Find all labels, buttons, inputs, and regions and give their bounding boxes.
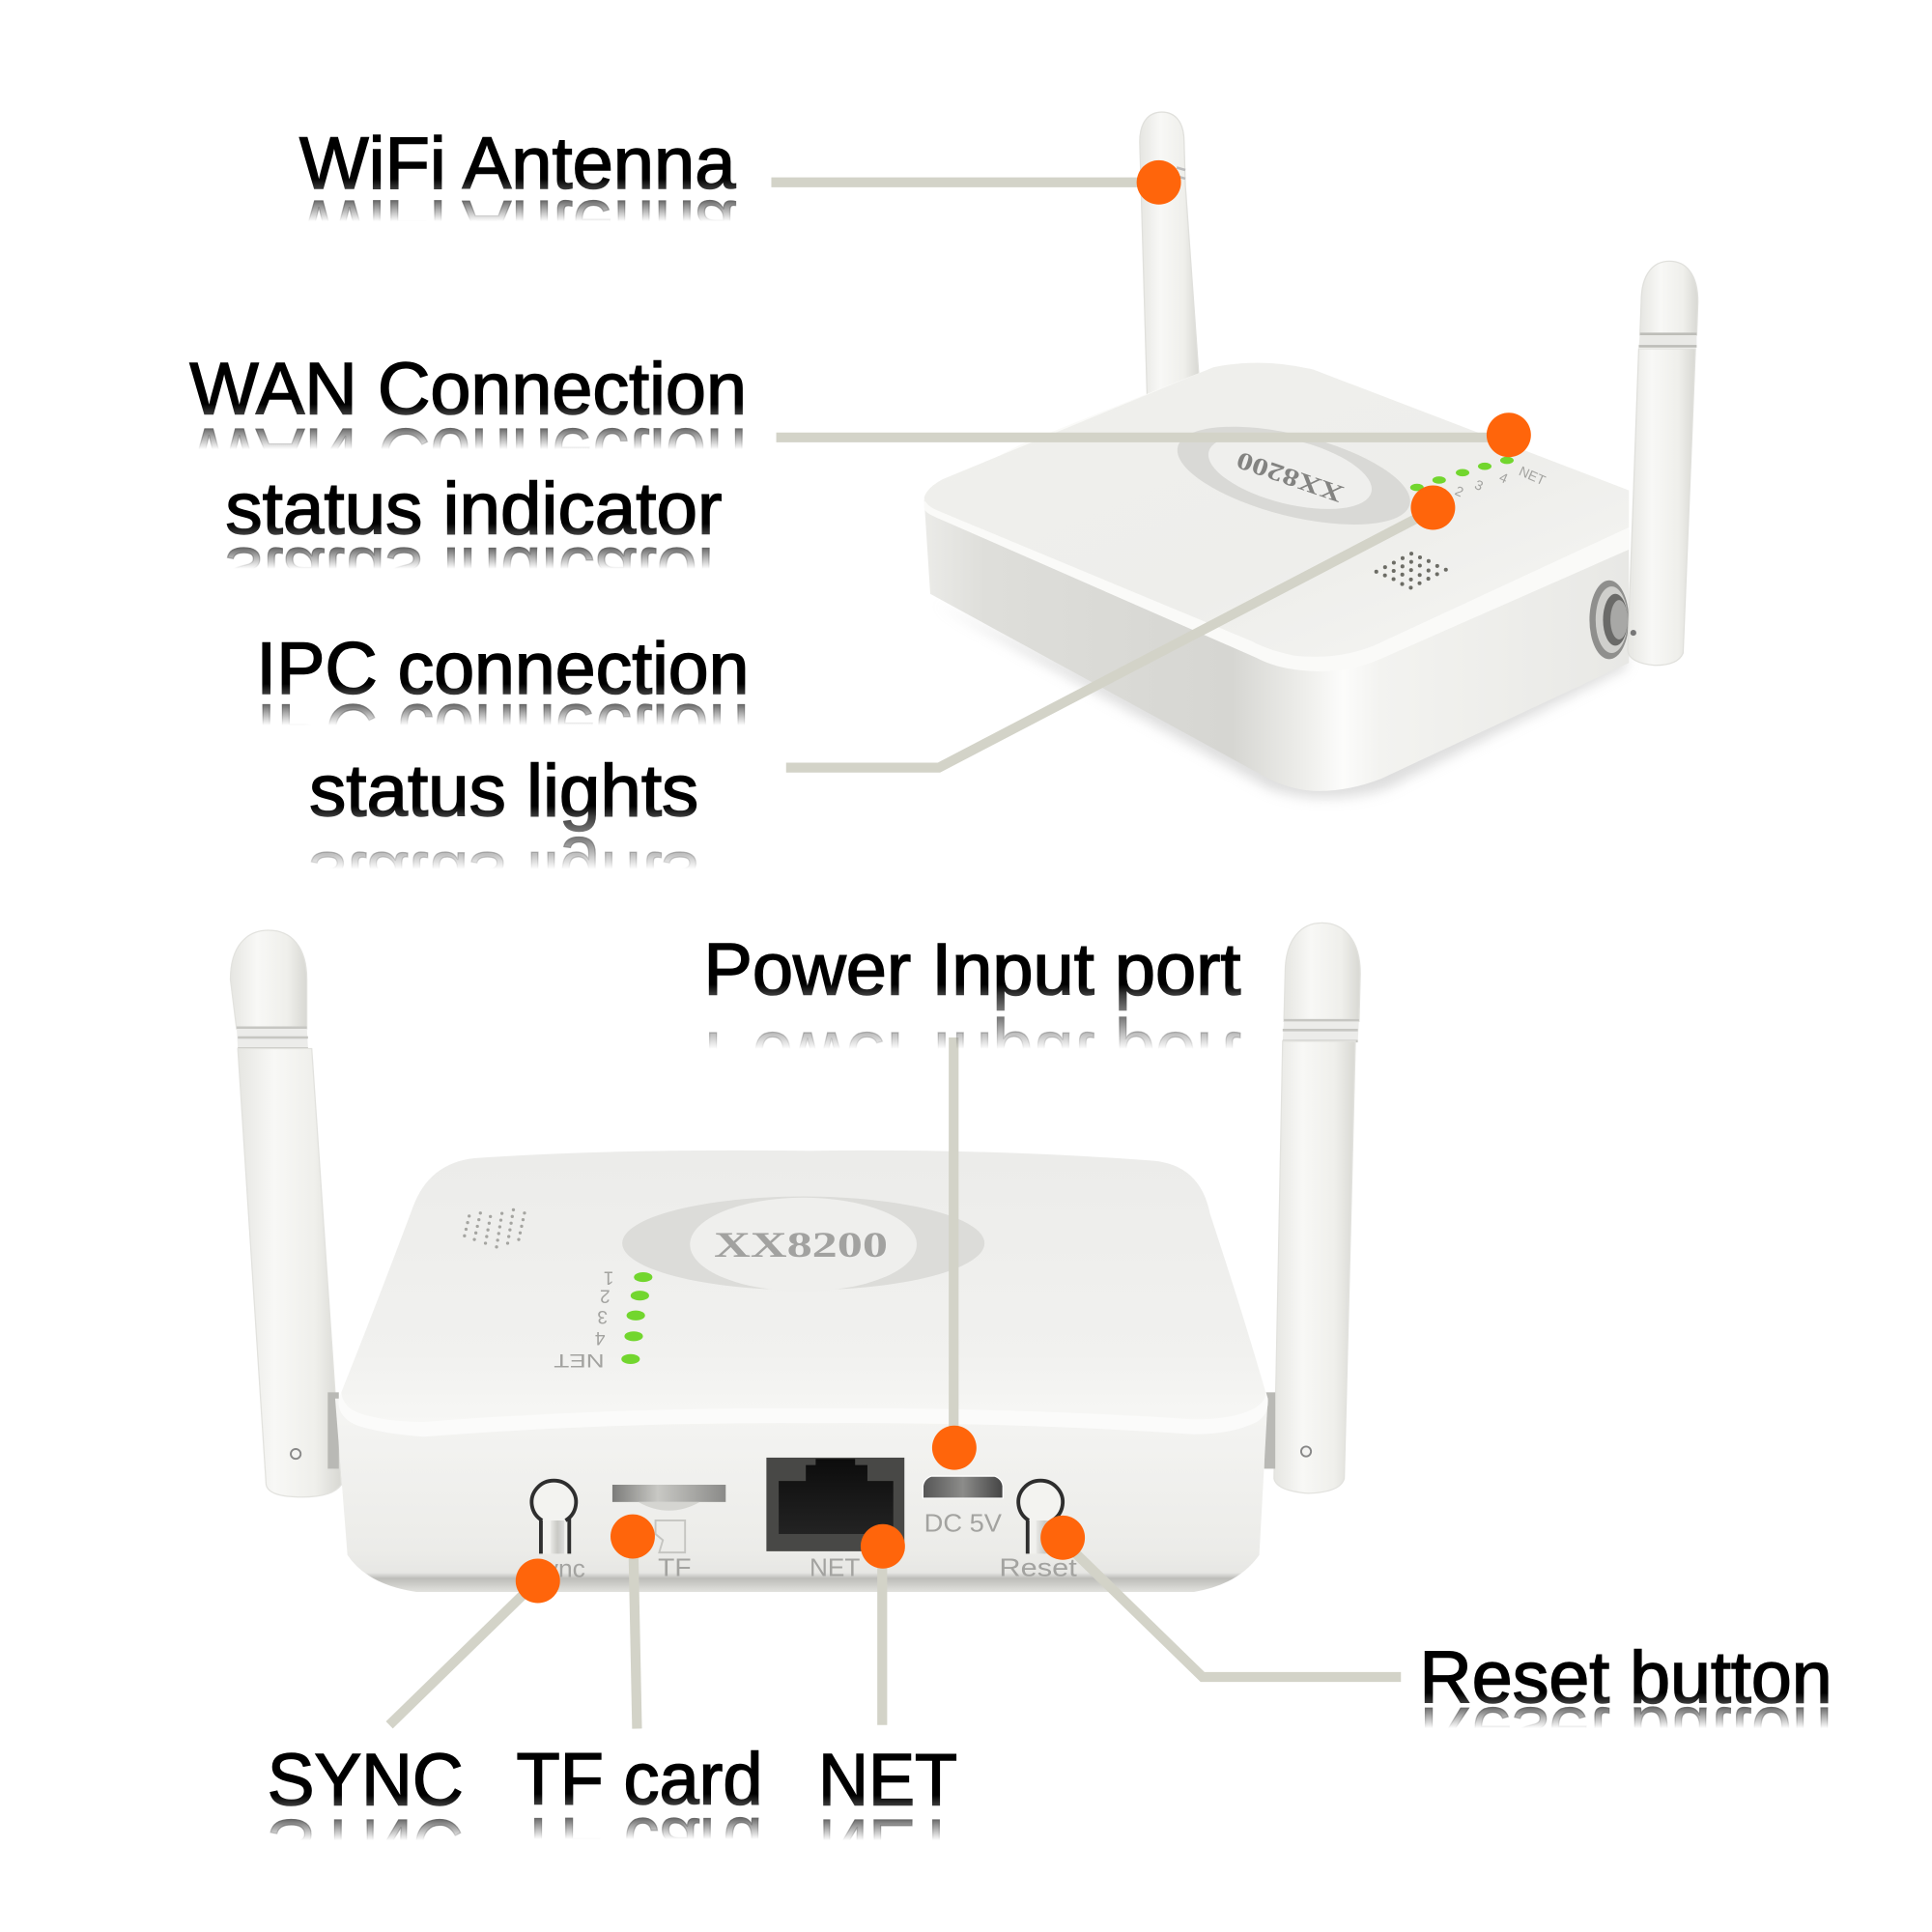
LED labels: 2 <box>1453 483 1466 499</box>
label: SYNC <box>268 1740 464 1886</box>
marker: reset <box>1040 1516 1085 1560</box>
label: status indicator: status indicator <box>225 468 722 550</box>
right antenna <box>1274 923 1360 1493</box>
bottom router photo: rear view <box>231 923 1360 1592</box>
label: WAN Connection: WAN Connection <box>189 412 747 495</box>
speaker holes <box>465 1208 525 1247</box>
label: status lights <box>309 750 698 919</box>
logo text: XX8200 <box>1233 446 1347 508</box>
LED labels: NET <box>1517 463 1548 488</box>
label: status lights: status lights <box>309 750 698 832</box>
logo badge <box>1168 408 1420 544</box>
marker: TF card <box>611 1515 655 1559</box>
label: IPC connection <box>256 628 750 771</box>
leader line: IPC status <box>786 515 1423 768</box>
leader line: reset <box>1065 1543 1401 1677</box>
antenna mounts <box>327 1392 1275 1468</box>
LED labels, upside down: 4 <box>594 1327 605 1348</box>
leader line: power input <box>950 1037 957 1441</box>
LED labels, upside down: 1 <box>604 1266 613 1287</box>
label: WiFi Antenna: WiFi Antenna <box>299 123 736 205</box>
LED labels, upside down: NET <box>554 1350 605 1370</box>
label: WiFi Antenna: WiFi Antenna <box>299 185 736 267</box>
label: TF card: TF card <box>516 1803 763 1885</box>
router lid <box>338 1151 1268 1436</box>
label: Power Input port: Power Input port <box>703 928 1240 1010</box>
router body front <box>335 1399 1267 1592</box>
top router photo: angled view <box>924 112 1698 798</box>
leader line: WiFi antenna <box>771 179 1146 186</box>
label: SYNC: SYNC <box>268 1804 464 1886</box>
label: TF card: TF card <box>516 1738 763 1820</box>
marker: IPC status <box>1410 486 1455 529</box>
label: Reset button: Reset button <box>1419 1637 1833 1719</box>
status LEDs <box>621 1272 652 1364</box>
LED labels, upside down: 3 <box>597 1306 608 1326</box>
reset button <box>1018 1481 1063 1553</box>
logo badge <box>622 1197 984 1292</box>
shadow under top router <box>936 604 1627 798</box>
label: NET: NET <box>818 1804 957 1886</box>
connector on side <box>1589 581 1629 659</box>
leader line: NET <box>878 1547 886 1725</box>
port labels: Reset <box>999 1554 1077 1581</box>
LED labels, upside down: 2 <box>600 1285 611 1305</box>
marker: power input <box>932 1426 977 1470</box>
label: NET: NET <box>818 1740 957 1822</box>
label: status indicator <box>225 468 722 614</box>
LED labels <box>1453 463 1548 499</box>
label: NET <box>818 1740 957 1886</box>
NET RJ45 port <box>766 1458 904 1551</box>
leader line: WAN status <box>777 434 1497 441</box>
label: Power Input port <box>703 928 1240 1098</box>
label: SYNC: SYNC <box>268 1740 464 1822</box>
marker: NET <box>861 1524 905 1569</box>
TF card slot <box>612 1485 725 1552</box>
port labels: NET <box>810 1554 860 1581</box>
status LEDs <box>1410 457 1514 491</box>
label: IPC connection: IPC connection <box>256 689 750 771</box>
label: WiFi Antenna <box>299 123 736 267</box>
marker: sync <box>516 1559 560 1603</box>
sync button <box>531 1481 576 1553</box>
marker: WiFi antenna <box>1137 160 1181 205</box>
port labels: DC 5V <box>924 1510 1002 1537</box>
label: IPC connection: IPC connection <box>256 628 750 710</box>
label: status indicator: status indicator <box>225 532 722 614</box>
leader line: TF card <box>634 1547 637 1729</box>
router body side faces <box>924 499 1629 791</box>
label: Reset button <box>1419 1637 1833 1774</box>
label: status lights: status lights <box>309 837 698 919</box>
speaker holes <box>1377 550 1454 587</box>
label: TF card <box>516 1738 763 1885</box>
right front antenna <box>1628 261 1698 666</box>
marker: WAN status <box>1487 412 1531 457</box>
label: Reset button: Reset button <box>1419 1691 1833 1774</box>
LED labels: 3 <box>1472 476 1486 494</box>
left antenna <box>231 930 341 1497</box>
port labels: TF <box>658 1554 692 1581</box>
label: WAN Connection <box>189 349 747 495</box>
label: Power Input port: Power Input port <box>703 1016 1240 1098</box>
LED labels, upside down <box>554 1266 613 1370</box>
micro USB port <box>923 1476 1003 1498</box>
port labels <box>528 1510 1077 1583</box>
port labels: Sync <box>528 1556 585 1583</box>
logo text: XX8200 <box>714 1225 888 1264</box>
LED labels: 4 <box>1497 469 1511 486</box>
router lid <box>924 363 1629 671</box>
leader line: sync <box>389 1586 532 1725</box>
left rear antenna <box>1140 112 1199 397</box>
label: WAN Connection: WAN Connection <box>189 349 747 431</box>
